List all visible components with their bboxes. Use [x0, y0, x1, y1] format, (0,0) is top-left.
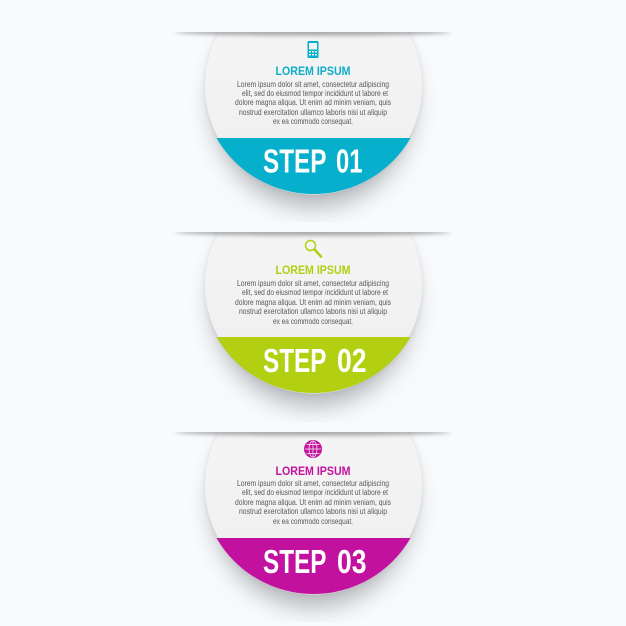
icon: phone: [308, 41, 318, 58]
top fold line: step 03: [176, 432, 450, 438]
text block: step 02: [235, 278, 391, 326]
panel shadow: step 01: [204, 0, 422, 207]
text block: step 01: [235, 79, 391, 126]
panel: step 03: [176, 432, 450, 620]
text block: step 01: dolore magna aliqua. Ut enim ad minim veniam, quis: [235, 97, 391, 107]
step label: step 02: 02: [337, 342, 366, 379]
text block: step 03: ex ea commodo consequat.: [273, 516, 353, 526]
disc: step 02: [205, 232, 422, 394]
disc: step 01: [205, 32, 422, 194]
step label: step 01: STEP: [263, 142, 326, 180]
coloured band: step 01: [216, 138, 410, 194]
disc: step 03: [205, 432, 422, 594]
panel: step 01: [175, 0, 451, 207]
text block: step 01: Lorem ipsum dolor sit amet, consectetur adipiscing: [237, 79, 389, 89]
text block: step 03: [235, 478, 391, 526]
text block: step 02: elit, sed do eiusmod tempor incididunt ut labore et: [242, 287, 389, 297]
text block: step 03: elit, sed do eiusmod tempor incididunt ut labore et: [242, 487, 389, 497]
text block: step 02: ex ea commodo consequat.: [273, 316, 353, 326]
text block: step 01: ex ea commodo consequat.: [273, 116, 353, 126]
text block: step 02: dolore magna aliqua. Ut enim ad minim veniam, quis: [235, 297, 391, 307]
text block: step 01: nostrud exercitation ullamco laboris nisi ut aliquip: [239, 107, 387, 117]
top fold line: step 02: [176, 232, 450, 238]
text block: step 02: nostrud exercitation ullamco laboris nisi ut aliquip: [239, 306, 387, 316]
coloured band: step 02: [216, 337, 410, 393]
heading: step 01: LOREM IPSUM: [276, 66, 350, 78]
coloured band: step 03: [216, 538, 410, 594]
text block: step 01: elit, sed do eiusmod tempor incididunt ut labore et: [242, 88, 389, 98]
step label: step 03: 03: [337, 543, 366, 580]
text block: step 03: nostrud exercitation ullamco laboris nisi ut aliquip: [239, 506, 387, 516]
panel: step 02: [176, 232, 450, 420]
text block: step 03: dolore magna aliqua. Ut enim ad minim veniam, quis: [235, 497, 391, 507]
step label: step 02: STEP: [263, 342, 326, 379]
heading: step 02: LOREM IPSUM: [276, 265, 350, 277]
text block: step 03: Lorem ipsum dolor sit amet, consectetur adipiscing: [237, 478, 389, 488]
icon: magnifier: [306, 240, 321, 256]
step label: step 03: STEP: [263, 543, 326, 580]
icon: globe: [304, 440, 322, 458]
heading: step 03: LOREM IPSUM: [276, 466, 350, 478]
text block: step 02: Lorem ipsum dolor sit amet, consectetur adipiscing: [237, 278, 389, 288]
panel shadow: step 02: [200, 233, 426, 420]
panel shadow: step 03: [200, 432, 426, 620]
step label: step 01: 01: [336, 142, 362, 180]
top fold line: step 01: [176, 32, 450, 38]
